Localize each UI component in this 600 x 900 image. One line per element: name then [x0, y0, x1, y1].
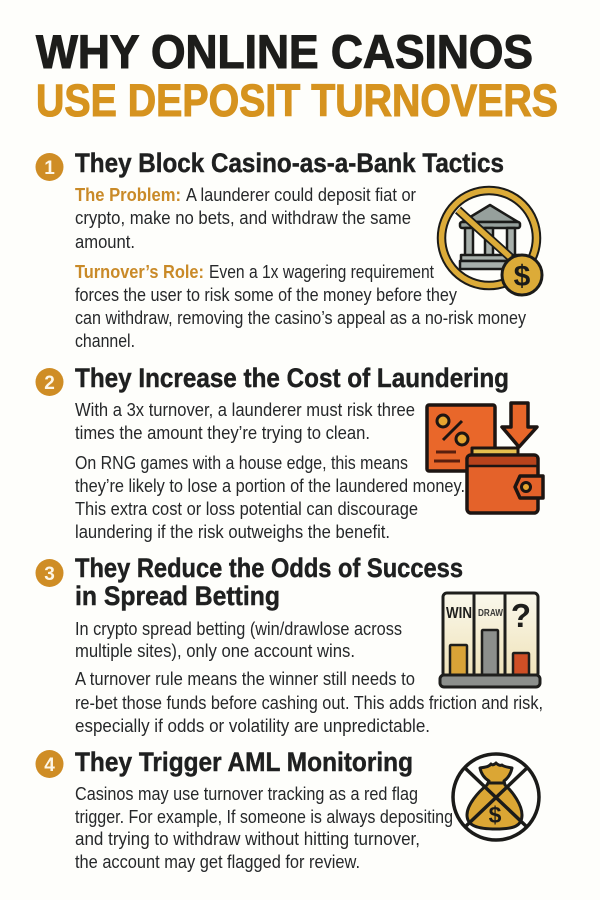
text block: turnover rule: especially if odds or volatility are unpredictable.: [75, 716, 430, 736]
panel: section 1: [36, 148, 542, 351]
text block: turnover's role: channel.: [75, 331, 135, 351]
text block: 3x turnover: [75, 400, 415, 443]
heading 4: They Trigger AML Monitoring: [75, 747, 413, 777]
icon: percent document, arrow and wallet: [427, 403, 543, 513]
panel: section 2: [36, 363, 543, 542]
title: WHY ONLINE CASINOS: [36, 25, 533, 78]
text block: RNG games: laundering if the risk outweighs the benefit.: [75, 522, 390, 542]
text block: turnover rule: [75, 669, 543, 736]
heading 1: They Block Casino-as-a-Bank Tactics: [75, 148, 504, 178]
text block: turnover rule: A turnover rule means the winner still needs to: [75, 669, 415, 689]
text block: AML monitoring: trigger. For example, If someone is always depositing: [75, 807, 453, 827]
text block: RNG games: This extra cost or loss potential can discourage: [75, 499, 418, 519]
text block: crypto spread betting: In crypto spread betting (win/drawlose across: [75, 619, 402, 639]
heading 2: They Increase the Cost of Laundering: [75, 363, 509, 393]
text block: AML monitoring: [75, 784, 453, 872]
text block: turnover's role: forces the user to risk some of the money before they: [75, 285, 457, 305]
icon: crossed-out bank with dollar coin: [442, 190, 542, 295]
number badge 4: [36, 750, 64, 778]
number badge 3: [36, 559, 64, 587]
text block: the problem: amount.: [75, 232, 135, 252]
text block: the problem: A launderer could deposit fiat or: [186, 185, 416, 205]
text block: turnover's role: can withdraw, removing the casino’s appeal as a no-risk money: [75, 308, 526, 328]
text block: crypto spread betting: [75, 619, 402, 661]
text block: 3x turnover: times the amount they’re trying to clean.: [75, 423, 370, 443]
icon: win draw question bar chart: WIN: [446, 605, 472, 622]
heading 3: They Reduce the Odds of Success: [75, 553, 463, 583]
text block: 3x turnover: With a 3x turnover, a launderer must risk three: [75, 400, 415, 420]
number badge 2: [36, 368, 64, 396]
number badge 4: 4: [44, 755, 55, 776]
icon: crossed-out money bag: $: [489, 802, 502, 828]
icon: win draw question bar chart: ?: [511, 597, 531, 634]
icon: crossed-out money bag: [453, 754, 539, 840]
text block: RNG games: On RNG games with a house edge, this means: [75, 453, 408, 473]
number badge 1: 1: [44, 158, 55, 179]
text block: AML monitoring: and trying to withdraw without hitting turnover,: [75, 829, 420, 849]
text block: turnover's role: [75, 262, 526, 351]
panel: section 3: [36, 553, 543, 736]
text block: RNG games: [75, 453, 465, 542]
icon: crossed-out bank with dollar coin: $: [514, 260, 531, 293]
number badge 3: 3: [44, 564, 55, 585]
text block: the problem: [75, 185, 416, 252]
panel: section 4: [36, 747, 539, 872]
number badge 1: [36, 153, 64, 181]
text block: AML monitoring: the account may get flagged for review.: [75, 852, 360, 872]
text block: turnover's role: Turnover’s Role:: [75, 262, 204, 282]
title: [36, 25, 558, 126]
text block: crypto spread betting: multiple sites), only one account wins.: [75, 641, 355, 661]
icon: win draw question bar chart: DRAW: [478, 608, 503, 619]
text block: RNG games: they’re likely to lose a portion of the laundered money.: [75, 476, 465, 496]
text block: turnover rule: re-bet those funds before cashing out. This adds friction and risk,: [75, 693, 543, 713]
text block: the problem: crypto, make no bets, and withdraw the same: [75, 208, 411, 228]
text block: turnover's role: Even a 1x wagering requirement: [209, 262, 434, 282]
heading 3: in Spread Betting: [75, 581, 280, 611]
icon: win draw question bar chart: [440, 593, 540, 687]
text block: AML monitoring: Casinos may use turnover tracking as a red flag: [75, 784, 418, 804]
heading 3: [75, 553, 463, 611]
text block: the problem: The Problem:: [75, 185, 181, 205]
number badge 2: 2: [44, 373, 55, 394]
